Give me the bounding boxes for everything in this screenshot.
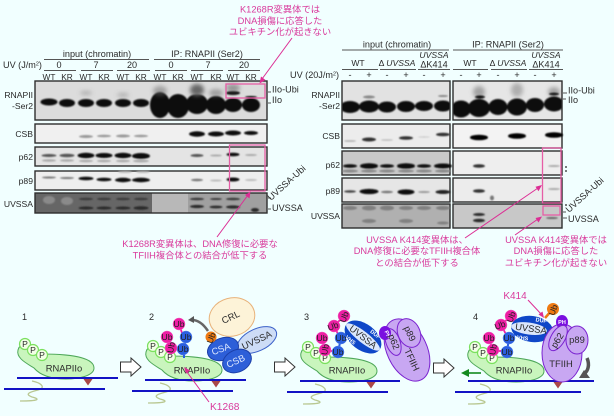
step 2 diagram: CSA — [210, 340, 232, 357]
blot RNAPII IP — [451, 81, 564, 120]
right row labels: -Ser2 — [319, 101, 340, 111]
left blot headers: WT — [80, 72, 92, 82]
left blot headers: ) — [39, 60, 42, 70]
blot CSB left — [35, 124, 267, 143]
right blot headers: - — [496, 70, 500, 80]
callout: K1268R ubiquitination: DNA損傷に応答した — [238, 15, 322, 26]
step 4 diagram — [455, 291, 594, 404]
left blot panel: K1268R — [3, 49, 308, 213]
step 4 diagram: Ub — [504, 333, 515, 343]
step 2 diagram: Ub — [174, 319, 185, 329]
step 2 diagram: UVSSA — [240, 328, 274, 352]
step 3 diagram: Ub — [326, 320, 340, 333]
step 3 diagram: PH — [383, 330, 391, 339]
callout: K1268R TFIIH binding: TFIIH複合体との結合が低下する — [133, 250, 267, 260]
left row labels: UVSSA — [4, 199, 33, 209]
right row labels: p89 — [326, 186, 340, 196]
blot p62 IP — [453, 151, 562, 175]
right blot headers: + — [366, 70, 372, 80]
step 3 diagram: P — [305, 342, 311, 352]
callout: UVSSA K414 boxes and TFIIH binding: UVSSA K414変異体は、 — [366, 234, 468, 245]
step 2 diagram — [132, 293, 281, 413]
arrow: step 1 to 2 — [120, 358, 141, 376]
blot CSB input — [342, 124, 450, 148]
blot RNAPII input — [340, 81, 452, 120]
right blot headers: - — [385, 70, 389, 80]
callout: K1268R ubiquitination: K1268R変異体では — [240, 4, 320, 14]
callout: K1268R ubiquitination — [226, 4, 331, 98]
step 3 diagram: 3 — [304, 312, 309, 322]
right blot headers: + — [551, 70, 557, 80]
step 1 diagram: P — [30, 345, 36, 355]
right blot headers: UV (20J/m — [290, 70, 333, 80]
left blot headers: WT — [227, 72, 239, 82]
step 2 diagram: Ub — [162, 332, 173, 342]
right blot headers: ) — [336, 70, 339, 80]
right blot headers: + — [514, 70, 520, 80]
right row labels: UVSSA-Ubi — [564, 175, 606, 214]
step 2 diagram: RNAPIIo — [174, 364, 210, 376]
UVSSA with VHS and DUF domains — [338, 314, 388, 361]
step 2 diagram: CSB — [224, 352, 247, 370]
step 1 diagram: RNAPIIo — [46, 362, 82, 374]
left blot headers: KR — [172, 72, 184, 82]
left row labels: UVSSA-Ubi — [266, 163, 308, 202]
left row labels: IIo — [272, 95, 282, 105]
callout: UVSSA K414 ubiquitination: ユビキチン化が起きない — [505, 257, 607, 268]
right blot headers: UVSSA — [419, 50, 449, 60]
blot p89 IP — [453, 178, 562, 202]
step 3 diagram: P — [313, 348, 319, 358]
left row labels — [4, 84, 308, 213]
step 3 diagram: P — [322, 353, 328, 363]
UVSSA with VHS and DUF domains: VHS — [344, 335, 356, 347]
step 3 diagram: p62 — [386, 332, 402, 351]
step 2 diagram: 2 — [149, 312, 154, 322]
step 4 diagram: Ub — [502, 347, 513, 357]
left row labels: CSB — [15, 129, 33, 139]
step 4 diagram: TFIIH — [549, 358, 573, 369]
left blot headers: 0 — [56, 60, 62, 70]
step 2 diagram: P — [158, 347, 164, 357]
step 2 diagram: P — [167, 352, 173, 362]
step 4 diagram: PH — [558, 320, 566, 326]
step 3 diagram: p89 — [402, 324, 418, 343]
right row labels: RNAPII — [311, 90, 340, 100]
UVSSA with VHS and DUF domains: DUF — [535, 317, 548, 325]
UVSSA with VHS and DUF domains: DUF — [369, 329, 382, 341]
left blot headers: input (chromatin) — [63, 49, 131, 59]
left row labels: p89 — [19, 176, 33, 186]
left blot headers: WT — [191, 72, 203, 82]
right blot headers: - — [348, 70, 352, 80]
left blot headers: 20 — [239, 60, 249, 70]
step 2 diagram: Ub — [178, 344, 189, 354]
step 4 diagram: Ub — [487, 343, 499, 356]
left blot headers: WT — [154, 72, 166, 82]
callout: UVSSA K414 boxes and TFIIH binding: DNA修復に必要なTFIIH複合体 — [354, 245, 481, 256]
left blot headers: WT — [43, 72, 55, 82]
left row labels: IIo-Ubi — [272, 84, 299, 94]
step 4 diagram: P — [489, 353, 495, 363]
left blot headers: 0 — [168, 60, 174, 70]
right row labels — [311, 86, 606, 224]
left blot headers — [3, 49, 260, 82]
right row labels: UVSSA — [568, 214, 600, 224]
callout: UVSSA K414 ubiquitination — [505, 206, 607, 268]
step 1 diagram — [4, 312, 118, 401]
step 3 diagram: Ub — [319, 343, 331, 356]
right blot headers: UVSSA — [531, 50, 561, 60]
callout: K1268R TFIIH binding: K1268R変異体は、DNA修復に必要な — [122, 238, 278, 249]
left row labels: p62 — [19, 152, 33, 162]
UVSSA with VHS and DUF domains — [509, 313, 555, 346]
step 4 diagram: Ub — [493, 319, 507, 332]
left row labels: RNAPII — [4, 90, 33, 100]
step 3 diagram: RNAPIIo — [329, 364, 365, 376]
right blot headers: 2 — [333, 72, 336, 78]
step 2 diagram: Ub — [165, 341, 177, 354]
right row labels: p62 — [326, 160, 340, 170]
left blot headers: KR — [61, 72, 73, 82]
callout: UVSSA K414 ubiquitination: UVSSA K414変異体では — [505, 234, 607, 245]
left blot headers: 7 — [93, 60, 99, 70]
left blot headers: KR — [135, 72, 147, 82]
right blot panel: UVSSA K414 — [290, 40, 606, 228]
K414 label: K414 — [503, 291, 527, 302]
arrow: step 3 to 4 — [434, 359, 454, 377]
right row labels: CSB — [322, 131, 340, 141]
step 4 diagram: p89 — [569, 334, 585, 345]
left blot headers: WT — [117, 72, 129, 82]
right blot headers: ΔK414 — [532, 60, 560, 70]
blot UVSSA input — [342, 204, 450, 228]
right row labels: IIo — [568, 95, 578, 105]
blot p62 left — [35, 147, 267, 166]
left blot headers: 2 — [36, 62, 39, 68]
left blot headers: 7 — [205, 60, 211, 70]
step 2 diagram: Ub — [205, 331, 218, 345]
right blot headers: - — [459, 70, 463, 80]
blot UVSSA IP — [453, 204, 562, 228]
left blot headers: KR — [245, 72, 257, 82]
left row labels: UVSSA — [272, 203, 304, 213]
blot RNAPII-Ser2 left — [35, 81, 267, 120]
step 4 diagram: P — [480, 348, 486, 358]
callout: K1268R TFIIH binding — [122, 145, 278, 260]
step 4 diagram: Ub — [547, 303, 560, 317]
step 3 diagram: Ub — [338, 310, 351, 324]
callout: K1268R ubiquitination: ユビキチン化が起きない — [229, 26, 331, 37]
right blot headers — [290, 40, 563, 80]
step 3 diagram: TFIIH — [402, 347, 422, 372]
UVSSA with VHS and DUF domains: UVSSA — [347, 322, 380, 351]
step 3 diagram: Ub — [336, 333, 347, 343]
K1268 label: K1268 — [210, 402, 240, 413]
right blot headers: WT — [351, 58, 365, 68]
right blot headers: Δ UVSSA — [379, 58, 416, 68]
right blot headers: ΔK414 — [420, 60, 448, 70]
step 3 diagram: Ub — [332, 347, 344, 357]
left blot headers: 20 — [127, 60, 137, 70]
step 4 diagram: p62 — [548, 331, 566, 350]
step 2 diagram: P — [150, 341, 156, 351]
left blot headers: IP: RNAPII (Ser2) — [171, 49, 243, 59]
right blot headers: IP: RNAPII (Ser2) — [472, 40, 544, 50]
right blot headers: - — [533, 70, 537, 80]
UVSSA with VHS and DUF domains: VHS — [517, 335, 529, 343]
blot p62 input — [342, 151, 452, 175]
arrow: step 2 to 3 — [274, 358, 295, 376]
callout: UVSSA K414 boxes and TFIIH binding: との結合が低下する — [375, 257, 459, 268]
callout: UVSSA K414 boxes and TFIIH binding — [354, 148, 561, 268]
right row labels: IIo-Ubi — [568, 86, 595, 96]
step 4 diagram: P — [472, 342, 478, 352]
blot UVSSA left — [35, 193, 267, 213]
step 1 diagram: P — [39, 350, 45, 360]
right blot headers: + — [476, 70, 482, 80]
right blot headers: Δ UVSSA — [490, 58, 527, 68]
blot p89 left — [35, 171, 267, 190]
right blot headers: WT — [463, 58, 477, 68]
left blot headers: KR — [98, 72, 110, 82]
step 1 diagram: P — [22, 339, 28, 349]
right blot headers: + — [440, 70, 446, 80]
left blot headers: KR — [210, 72, 222, 82]
step 2 diagram: Ub — [180, 332, 192, 342]
step 4 diagram: RNAPIIo — [496, 364, 532, 376]
right row labels: UVSSA — [311, 211, 340, 221]
step 4 diagram: Ub — [484, 333, 495, 343]
callout: UVSSA K414 ubiquitination: DNA損傷に応答した — [514, 245, 598, 256]
step 3 diagram: Ub — [316, 333, 328, 343]
step 3 diagram — [287, 310, 439, 404]
step 4 diagram: Ub — [505, 310, 518, 324]
left blot headers: UV (J/m — [3, 60, 36, 70]
right blot headers: - — [422, 70, 426, 80]
right blot headers: input (chromatin) — [363, 40, 431, 50]
blot CSB IP — [453, 124, 563, 148]
step 4 diagram: 4 — [473, 312, 478, 322]
step 2 diagram: CRL — [220, 308, 241, 326]
K1268 label — [184, 367, 240, 413]
UVSSA with VHS and DUF domains: UVSSA — [515, 321, 548, 336]
right blot headers: + — [403, 70, 409, 80]
blot p89 input — [342, 178, 450, 202]
left row labels: -Ser2 — [12, 101, 33, 111]
step 1 diagram: 1 — [22, 312, 27, 322]
